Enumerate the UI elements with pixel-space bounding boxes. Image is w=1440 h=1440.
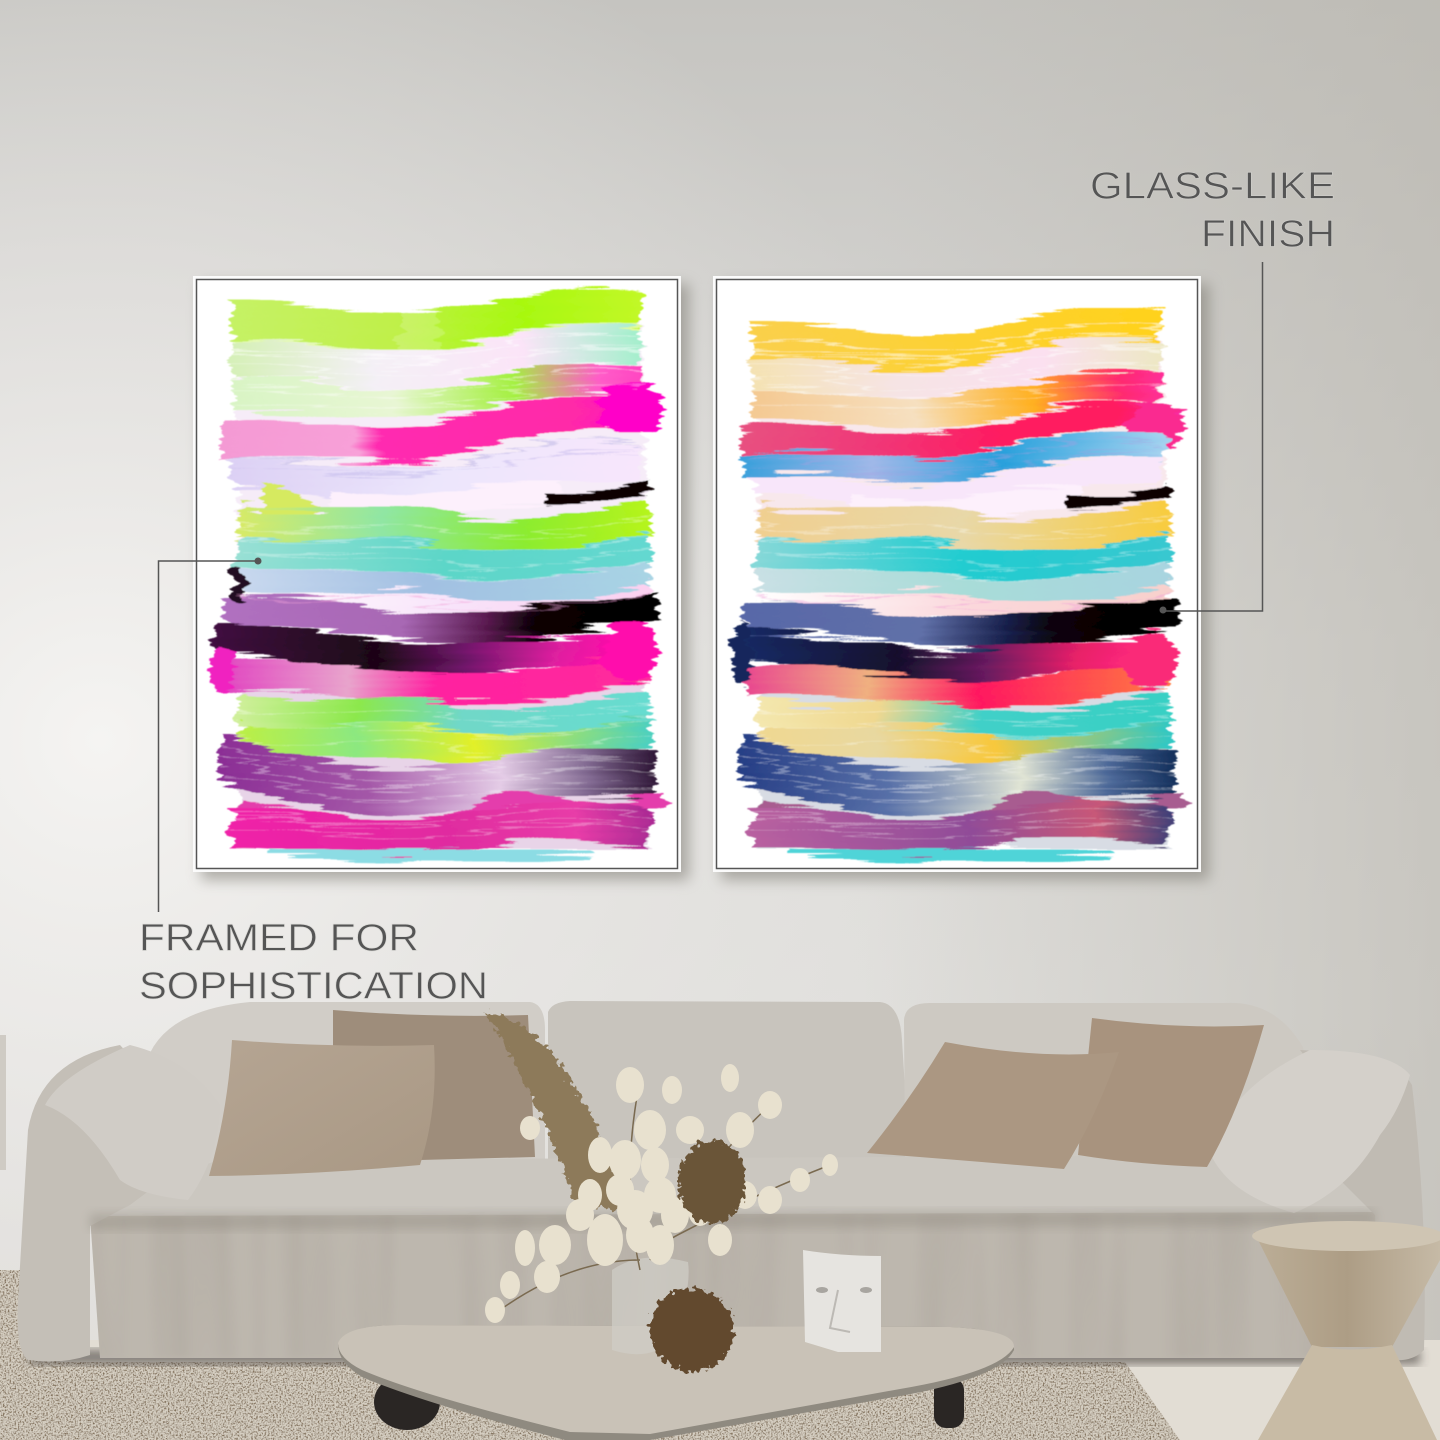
fold shading [90,1210,1375,1230]
table wheel: left [374,1374,440,1430]
callout dot [1160,606,1166,614]
coffee table [338,1325,1014,1440]
callout dot [254,558,262,564]
flower stems [500,1080,830,1310]
throw pillow: left [45,1045,220,1200]
cushion: front right [867,1042,1119,1169]
side table [1252,1221,1440,1440]
callout: glass-like finish [1090,166,1335,614]
callout text [1090,166,1335,256]
table top [338,1325,1014,1440]
dried flowers: lunaria sprays [485,1064,838,1323]
callout: framed for sophistication [139,558,488,1008]
sofa left arm [17,1045,170,1362]
sculpture: white face block [803,1250,881,1352]
paint strokes: neon pink and green [210,295,665,856]
sofa front [90,1212,1385,1358]
rug [0,1270,1180,1440]
callout text [139,918,488,1008]
callout text: FRAMED FOR [139,918,419,960]
cushion: back right [1078,1018,1264,1167]
callout text: SOPHISTICATION [139,966,488,1008]
throw pillow: right [1211,1050,1410,1213]
sofa right arm [1300,1050,1425,1360]
panel: left framed painting [193,276,689,880]
callout leader line [158,561,258,912]
callout text: FINISH [1201,214,1335,256]
dried hydrangea: upper [678,1140,746,1224]
table wheel: right [934,1378,964,1428]
floor [0,1340,1440,1440]
callout leader line [1163,262,1262,611]
dried hydrangea: lower [650,1288,734,1372]
dried pampas stem [485,1012,620,1210]
callout text: GLASS-LIKE [1090,166,1335,208]
sofa [17,1001,1425,1364]
cushion: front left [209,1040,435,1176]
sofa shadow on floor [30,1350,1420,1364]
paint strokes: warm yellow, teal and navy [732,324,1185,856]
sofa seat [90,1155,1380,1222]
sofa back cushions [147,1001,1320,1170]
left wall object edge [0,1035,6,1170]
panel: right framed painting [713,276,1209,880]
cushion: back left [333,1010,535,1160]
glass vase [612,1258,689,1354]
